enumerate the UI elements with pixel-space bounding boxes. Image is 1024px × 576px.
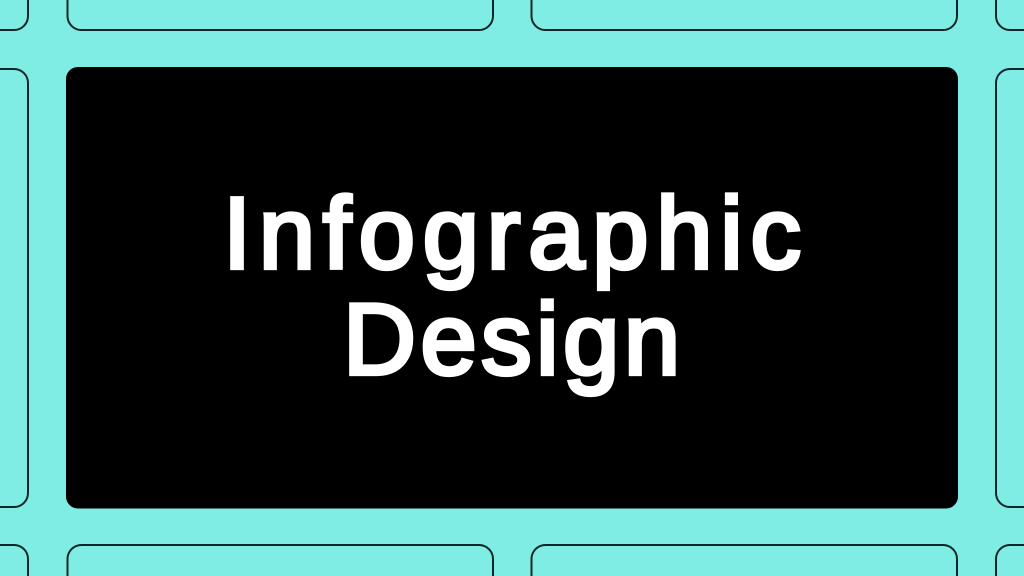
outlined panel: bottom right corner — [996, 545, 1024, 576]
outlined panel: middle left — [0, 69, 28, 507]
outlined panel: top left corner — [0, 0, 28, 30]
title — [223, 178, 801, 396]
outlined panel: bottom left corner — [0, 545, 28, 576]
outlined panel: top right corner — [996, 0, 1024, 30]
outlined panel: bottom right — [532, 545, 957, 576]
title line 1: Infographic — [223, 178, 801, 290]
central black panel — [66, 67, 958, 508]
outlined panel: top right — [532, 0, 957, 30]
outlined panel: middle right — [996, 69, 1024, 507]
outlined panel: top left — [68, 0, 493, 30]
outlined panel: bottom left — [68, 545, 493, 576]
title line 2: Design — [343, 284, 680, 396]
